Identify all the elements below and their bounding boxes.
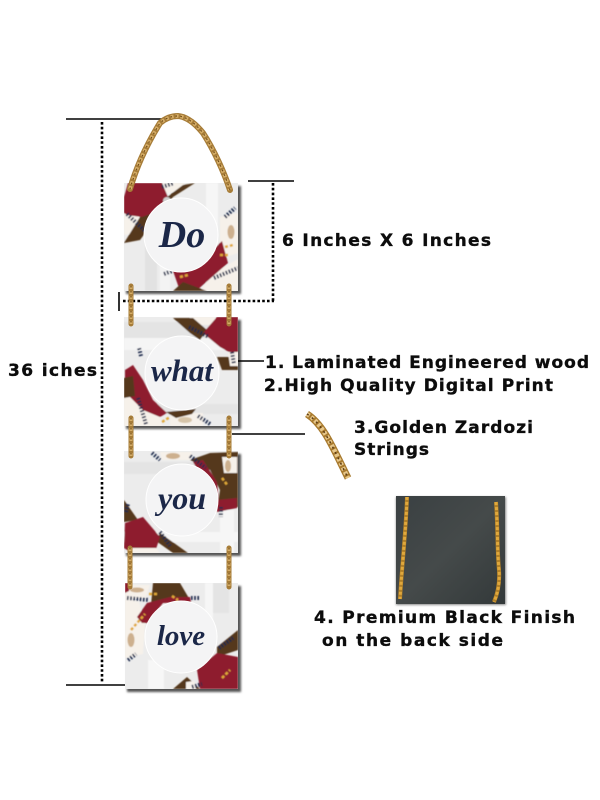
feature 4: on the back side: [322, 631, 503, 651]
height dimension: 36 inches: [66, 119, 163, 685]
icon: golden string sample: [307, 414, 348, 478]
word: love: love: [157, 620, 205, 652]
feature 4: [314, 608, 575, 651]
panel: what: [124, 317, 241, 429]
height label: 36 iches: [8, 361, 97, 381]
photo: black back side: [396, 496, 506, 605]
word: Do: Do: [158, 214, 205, 256]
feature 3: 3.Golden Zardozi: [354, 418, 533, 438]
width dimension: 6 inches: [119, 181, 294, 311]
size label: 6 Inches X 6 Inches: [282, 231, 491, 251]
word: you: you: [154, 480, 206, 516]
panel: love: [125, 583, 241, 692]
feature 1: 1. Laminated Engineered wood: [265, 353, 589, 373]
feature 3: Strings: [354, 440, 429, 460]
rope: top hanger: [130, 116, 230, 190]
panel: Do: [124, 183, 241, 294]
leader line: material: [238, 360, 264, 362]
feature 3: [354, 418, 533, 460]
feature 4: 4. Premium Black Finish: [314, 608, 575, 628]
ropes: connecting strings: [130, 286, 229, 587]
panel: you: [124, 451, 241, 556]
word: what: what: [151, 353, 214, 388]
leader line: string: [232, 433, 305, 435]
feature 2: 2.High Quality Digital Print: [264, 376, 553, 396]
